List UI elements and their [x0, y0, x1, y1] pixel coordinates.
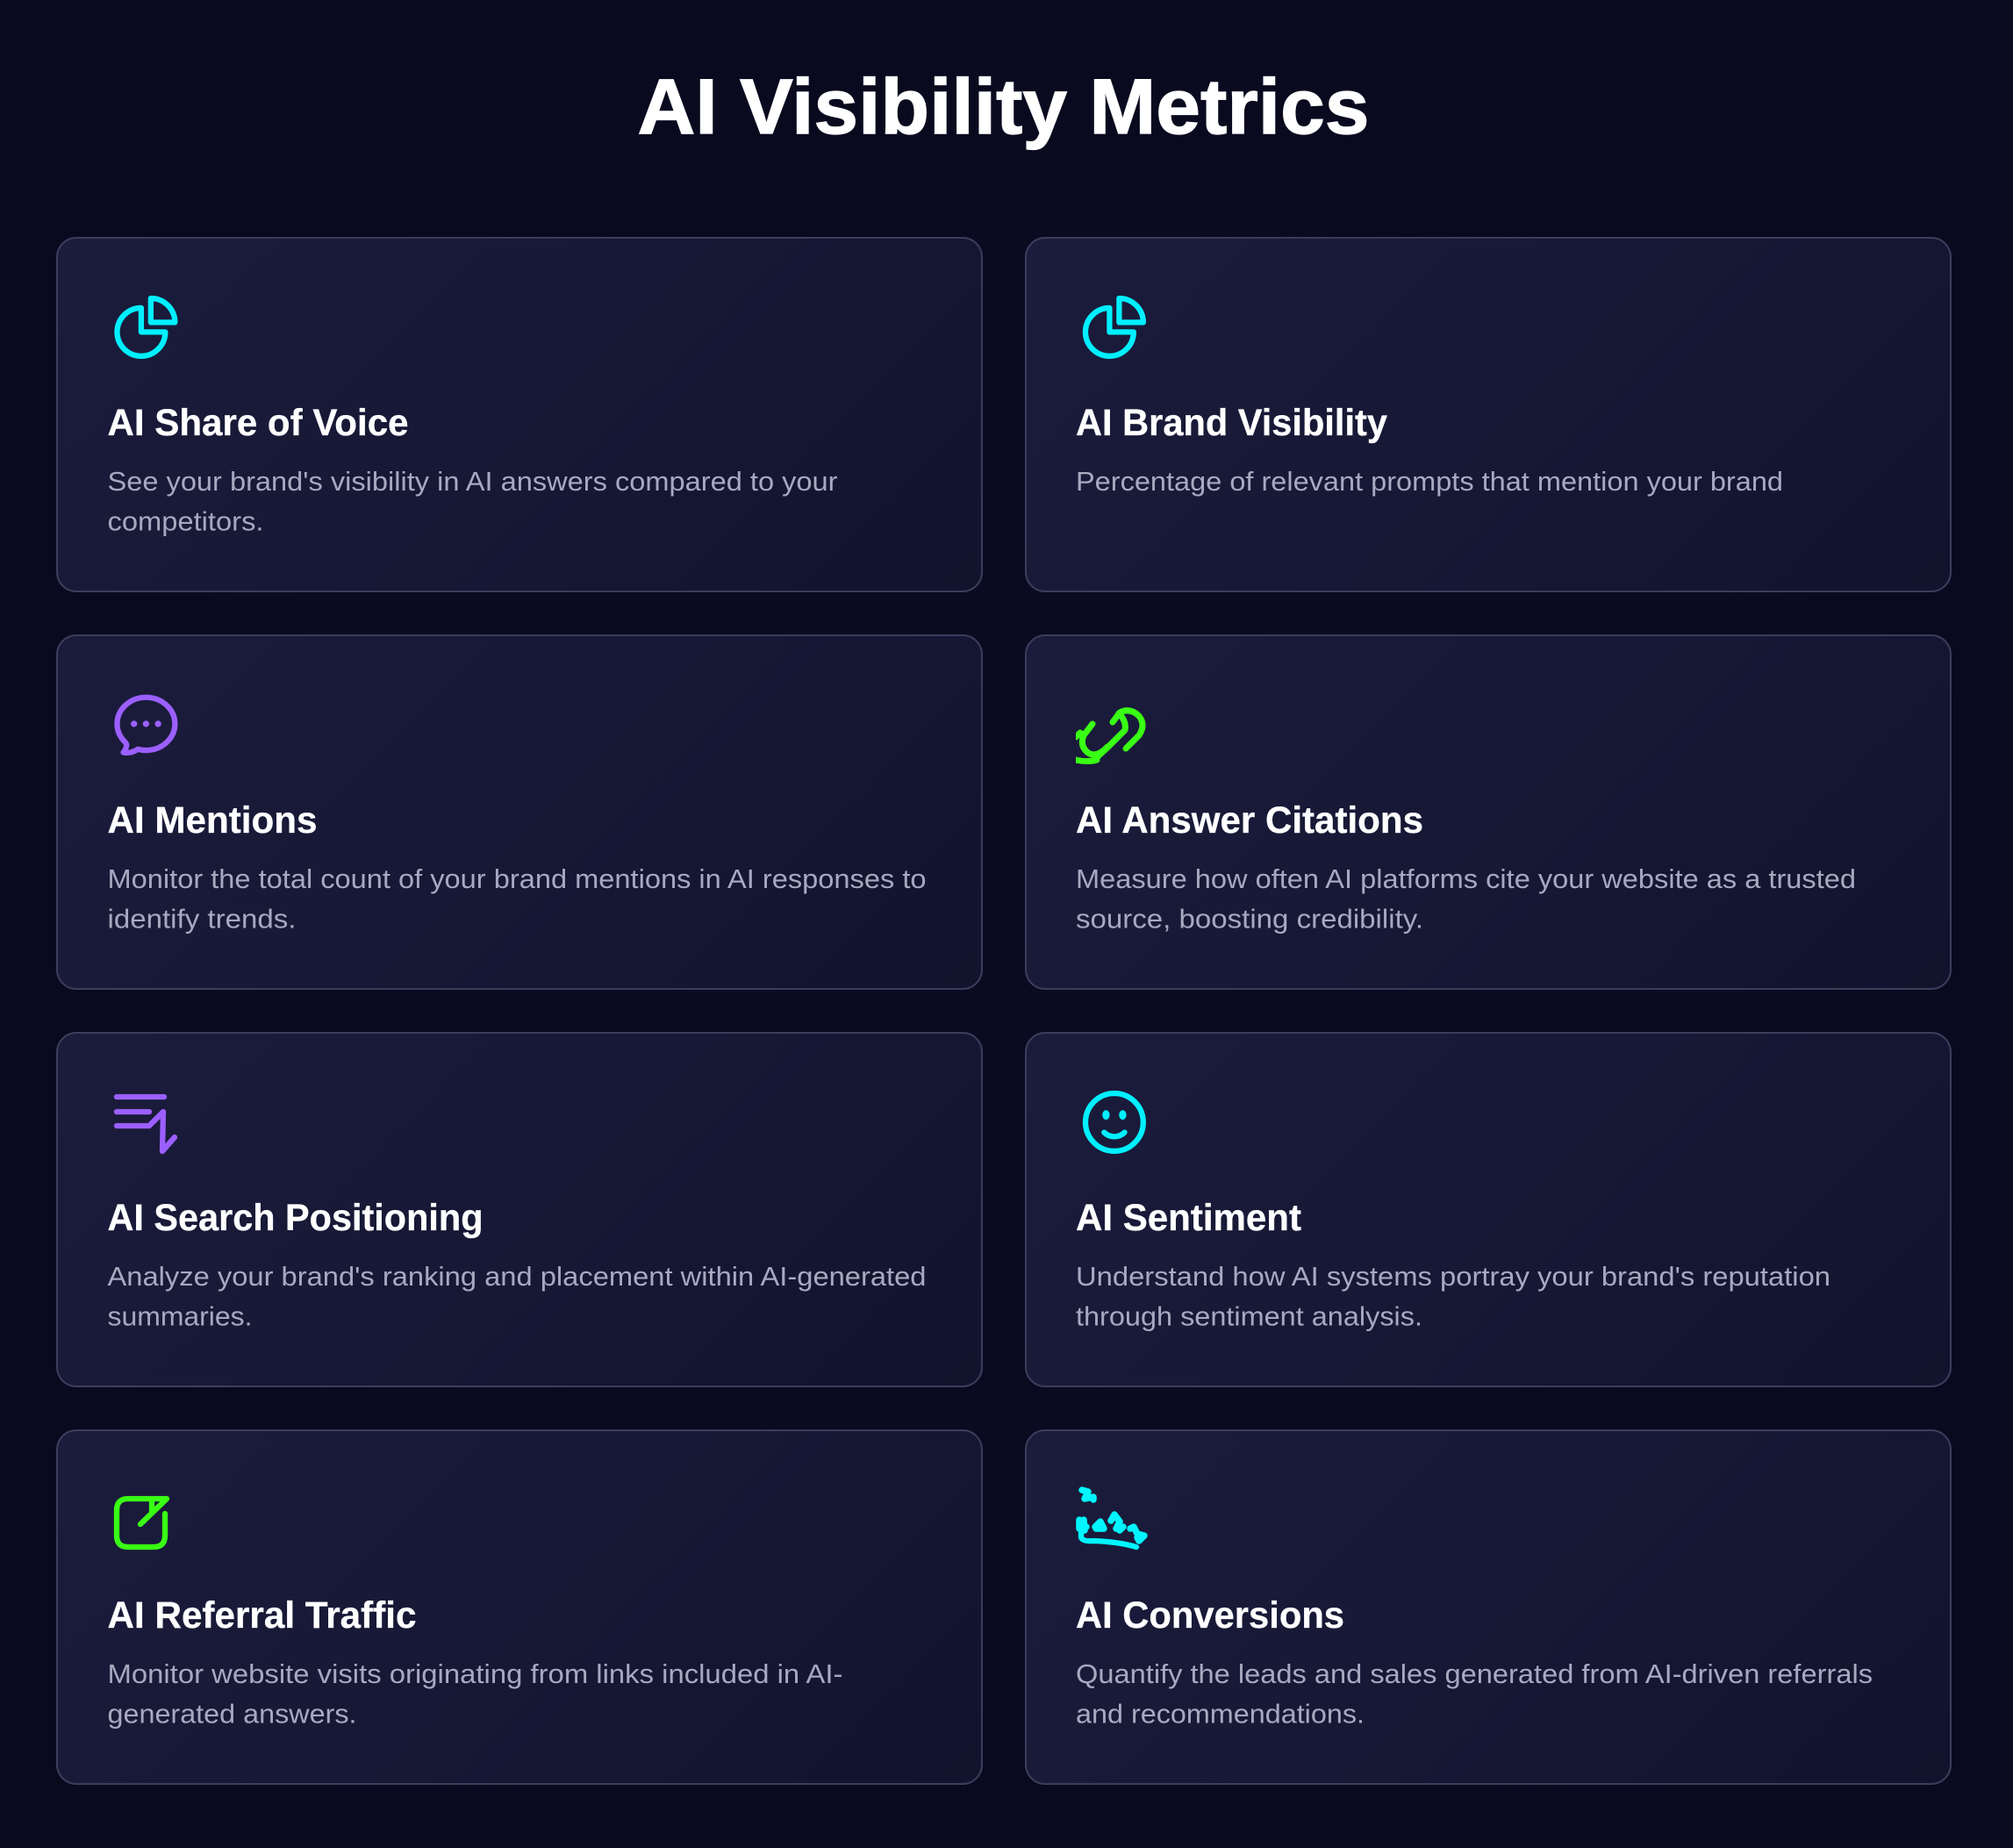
icon: link: [1076, 711, 1143, 762]
panel: AI Answer Citations: [1026, 635, 1951, 989]
description: Measure how often AI platforms cite your website as a trusted: [1076, 863, 1856, 894]
heading: AI Brand Visibility: [1076, 402, 1387, 444]
description: competitors.: [107, 505, 263, 537]
heading: AI Conversions: [1076, 1594, 1344, 1637]
panel: AI Mentions: [57, 635, 982, 989]
icon: smiley face: [1085, 1093, 1143, 1151]
description: summaries.: [107, 1300, 253, 1332]
description: Quantify the leads and sales generated from AI-driven referrals: [1076, 1658, 1873, 1689]
panel: AI Share of Voice: [57, 238, 982, 591]
description: Analyze your brand's ranking and placement within AI-generated: [107, 1261, 927, 1292]
panel: AI Search Positioning: [57, 1033, 982, 1386]
heading: AI Share of Voice: [107, 402, 409, 444]
panel: AI Conversions: [1026, 1430, 1951, 1784]
icon: crown: [1079, 1490, 1144, 1547]
icon: pie chart: [1085, 298, 1143, 356]
description: generated answers.: [107, 1699, 356, 1729]
description: Percentage of relevant prompts that mention your brand: [1076, 466, 1783, 497]
icon: pie chart: [117, 298, 175, 356]
description: See your brand's visibility in AI answers compared to your: [107, 466, 838, 497]
panel: AI Sentiment: [1026, 1033, 1951, 1386]
heading: AI Search Positioning: [107, 1197, 483, 1239]
title: AI Visibility Metrics: [637, 62, 1369, 150]
description: Understand how AI systems portray your brand's reputation: [1076, 1261, 1830, 1292]
panel: AI Referral Traffic: [57, 1430, 982, 1784]
icon: external link square: [117, 1499, 167, 1547]
icon: chat bubble: [117, 698, 175, 753]
description: source, boosting credibility.: [1076, 904, 1423, 934]
description: Monitor the total count of your brand mentions in AI responses to: [107, 863, 927, 894]
description: and recommendations.: [1076, 1699, 1365, 1729]
description: identify trends.: [107, 904, 297, 934]
heading: AI Answer Citations: [1076, 799, 1423, 842]
heading: AI Mentions: [107, 799, 318, 842]
description: Monitor website visits originating from links included in AI-: [107, 1658, 842, 1689]
heading: AI Referral Traffic: [107, 1594, 416, 1637]
panel: AI Brand Visibility: [1026, 238, 1951, 591]
heading: AI Sentiment: [1076, 1197, 1301, 1239]
description: through sentiment analysis.: [1076, 1300, 1422, 1332]
icon: ranked list: [117, 1097, 175, 1151]
